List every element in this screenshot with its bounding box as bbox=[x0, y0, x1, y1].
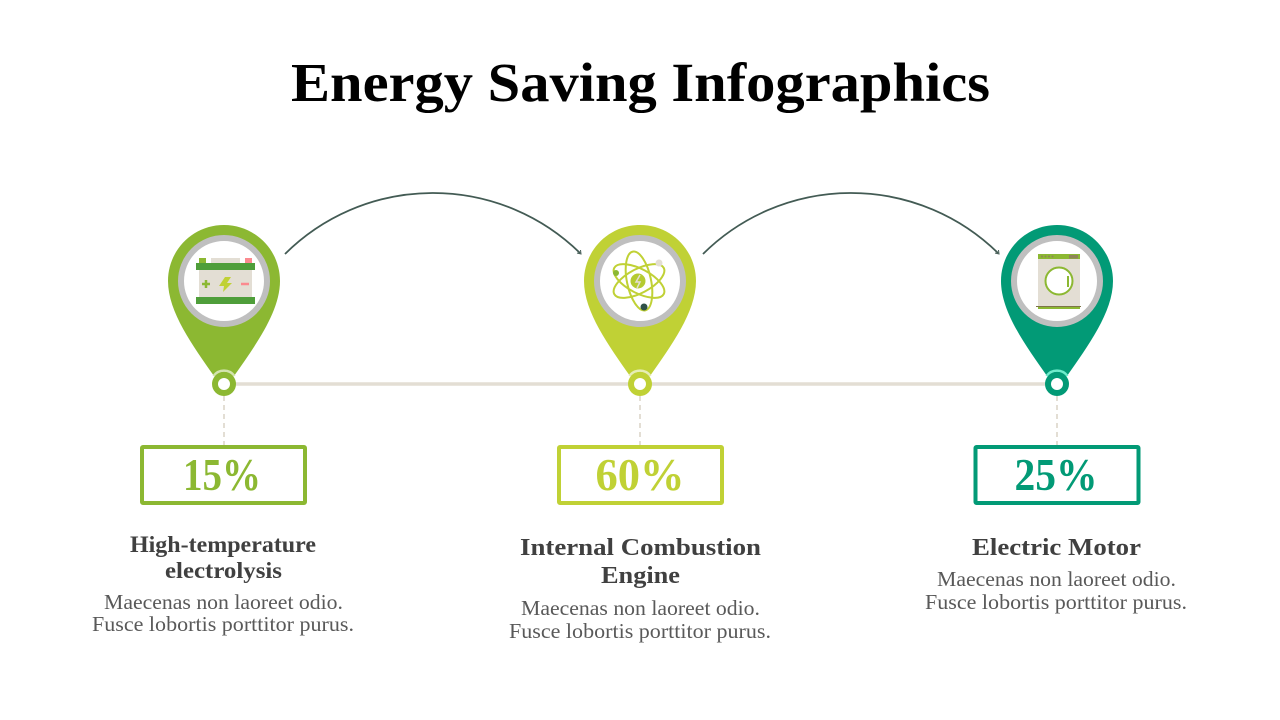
text block: internal combustion engine: Maecenas non laoreet odio. bbox=[521, 596, 760, 620]
text block: high-temperature electrolysis: Fusce lobortis porttitor purus. bbox=[92, 612, 354, 636]
title: Energy Saving Infographics bbox=[291, 52, 990, 113]
value box: 15%: 15% bbox=[183, 450, 261, 500]
text block: high-temperature electrolysis: electrolysis bbox=[165, 558, 282, 583]
value box: 25% bbox=[976, 447, 1138, 503]
text block: high-temperature electrolysis bbox=[92, 532, 354, 636]
arrow: first to second bbox=[285, 193, 581, 254]
icon: washing machine bbox=[1036, 254, 1081, 309]
icon: atom bbox=[609, 249, 669, 313]
text block: electric motor: Electric Motor bbox=[972, 535, 1141, 561]
text block: high-temperature electrolysis: Maecenas non laoreet odio. bbox=[104, 590, 343, 614]
timeline line bbox=[224, 382, 1057, 386]
text block: internal combustion engine bbox=[509, 535, 771, 643]
marker 2: atom bbox=[584, 225, 696, 446]
text block: internal combustion engine: Internal Combustion bbox=[520, 535, 761, 561]
arrow: second to third bbox=[703, 193, 999, 254]
text block: electric motor: Fusce lobortis porttitor purus. bbox=[925, 590, 1187, 614]
value box: 60% bbox=[559, 447, 722, 503]
text block: electric motor bbox=[925, 535, 1187, 614]
marker 1: battery bbox=[168, 225, 280, 446]
text block: electric motor: Maecenas non laoreet odio. bbox=[937, 567, 1176, 591]
text block: internal combustion engine: Engine bbox=[601, 563, 680, 589]
icon: battery bbox=[196, 258, 255, 304]
value box: 25%: 25% bbox=[1014, 450, 1098, 500]
value box: 60%: 60% bbox=[596, 450, 684, 500]
marker 3: washing machine bbox=[1001, 225, 1113, 446]
value box: 15% bbox=[142, 447, 305, 503]
text block: high-temperature electrolysis: High-temperature bbox=[130, 532, 316, 557]
text block: internal combustion engine: Fusce lobortis porttitor purus. bbox=[509, 619, 771, 643]
